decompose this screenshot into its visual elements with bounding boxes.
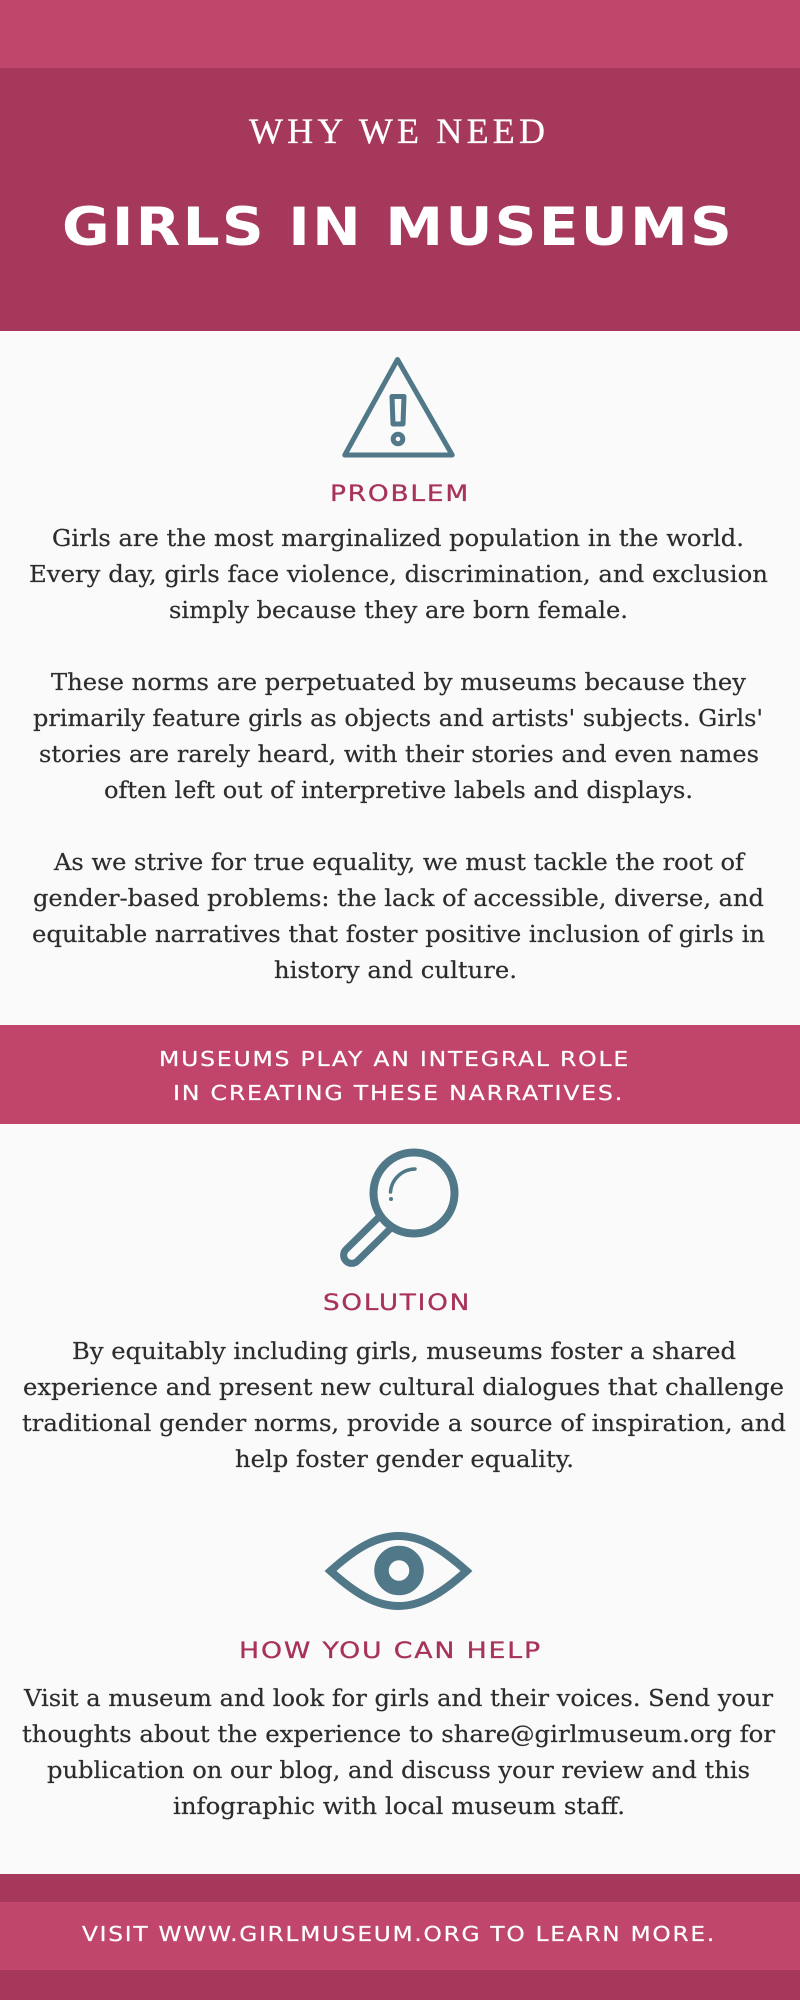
- icon: magnifying glass: [344, 1152, 454, 1263]
- title: girls in museums: GIRLS IN MUSEUMS: [62, 197, 734, 258]
- text: problem paragraph 2: [33, 670, 763, 804]
- banner: museums play an integral role: MUSEUMS PLAY AN INTEGRAL ROLE: [159, 1047, 630, 1071]
- icon: warning triangle: [345, 360, 452, 455]
- text: solution body: experience and present new cultural dialogues that challenge: [23, 1375, 784, 1401]
- panel: how you can help: [22, 1536, 775, 1820]
- panel: solution: [22, 1152, 786, 1473]
- text: problem paragraph 3: gender-based problems: the lack of accessible, diverse, and: [33, 886, 764, 912]
- text: help body: [22, 1686, 775, 1820]
- heading: problem: PROBLEM: [330, 482, 470, 507]
- panel: problem: [29, 360, 768, 984]
- text: problem paragraph 3: history and culture.: [274, 958, 517, 984]
- panel: header: [0, 0, 800, 331]
- text: problem paragraph 2: These norms are perpetuated by museums because they: [51, 670, 746, 696]
- banner: museums play an integral role: [0, 1025, 800, 1124]
- text: solution body: By equitably including girls, museums foster a shared: [72, 1339, 736, 1365]
- text: problem paragraph 2: primarily feature girls as objects and artists' subjects. Girls': [33, 706, 763, 732]
- text: problem paragraph 2: often left out of interpretive labels and displays.: [104, 778, 693, 804]
- text: solution body: [22, 1339, 786, 1473]
- text: problem paragraph 3: equitable narratives that foster positive inclusion of girls in: [32, 922, 765, 948]
- text: solution body: traditional gender norms, provide a source of inspiration, and: [22, 1411, 786, 1437]
- heading: why we need: WHY WE NEED: [249, 111, 545, 151]
- text: problem paragraph 3: As we strive for true equality, we must tackle the root of: [53, 850, 746, 876]
- icon: eye: [330, 1536, 466, 1606]
- text: problem paragraph 1: [29, 526, 768, 624]
- text: problem paragraph 1: Girls are the most marginalized population in the world.: [52, 526, 744, 552]
- text: help body: Visit a museum and look for girls and their voices. Send your: [23, 1686, 773, 1712]
- text: help body: thoughts about the experience to share@girlmuseum.org for: [22, 1722, 775, 1748]
- text: help body: infographic with local museum staff.: [173, 1794, 625, 1820]
- text: problem paragraph 2: stories are rarely heard, with their stories and even names: [39, 742, 759, 768]
- heading: solution: SOLUTION: [323, 1291, 471, 1316]
- heading: how you can help: HOW YOU CAN HELP: [239, 1639, 542, 1664]
- text: problem paragraph 1: simply because they are born female.: [169, 598, 628, 624]
- text: solution body: help foster gender equality.: [235, 1447, 574, 1473]
- text: problem paragraph 1: Every day, girls face violence, discrimination, and exclusion: [29, 562, 768, 588]
- banner: museums play an integral role: IN CREATING THESE NARRATIVES.: [173, 1081, 624, 1105]
- text: problem paragraph 3: [32, 850, 765, 984]
- panel: footer: [0, 1874, 800, 2000]
- text: help body: publication on our blog, and discuss your review and this: [47, 1758, 750, 1784]
- text: footer call to action: VISIT WWW.GIRLMUSEUM.ORG TO LEARN MORE.: [82, 1922, 716, 1946]
